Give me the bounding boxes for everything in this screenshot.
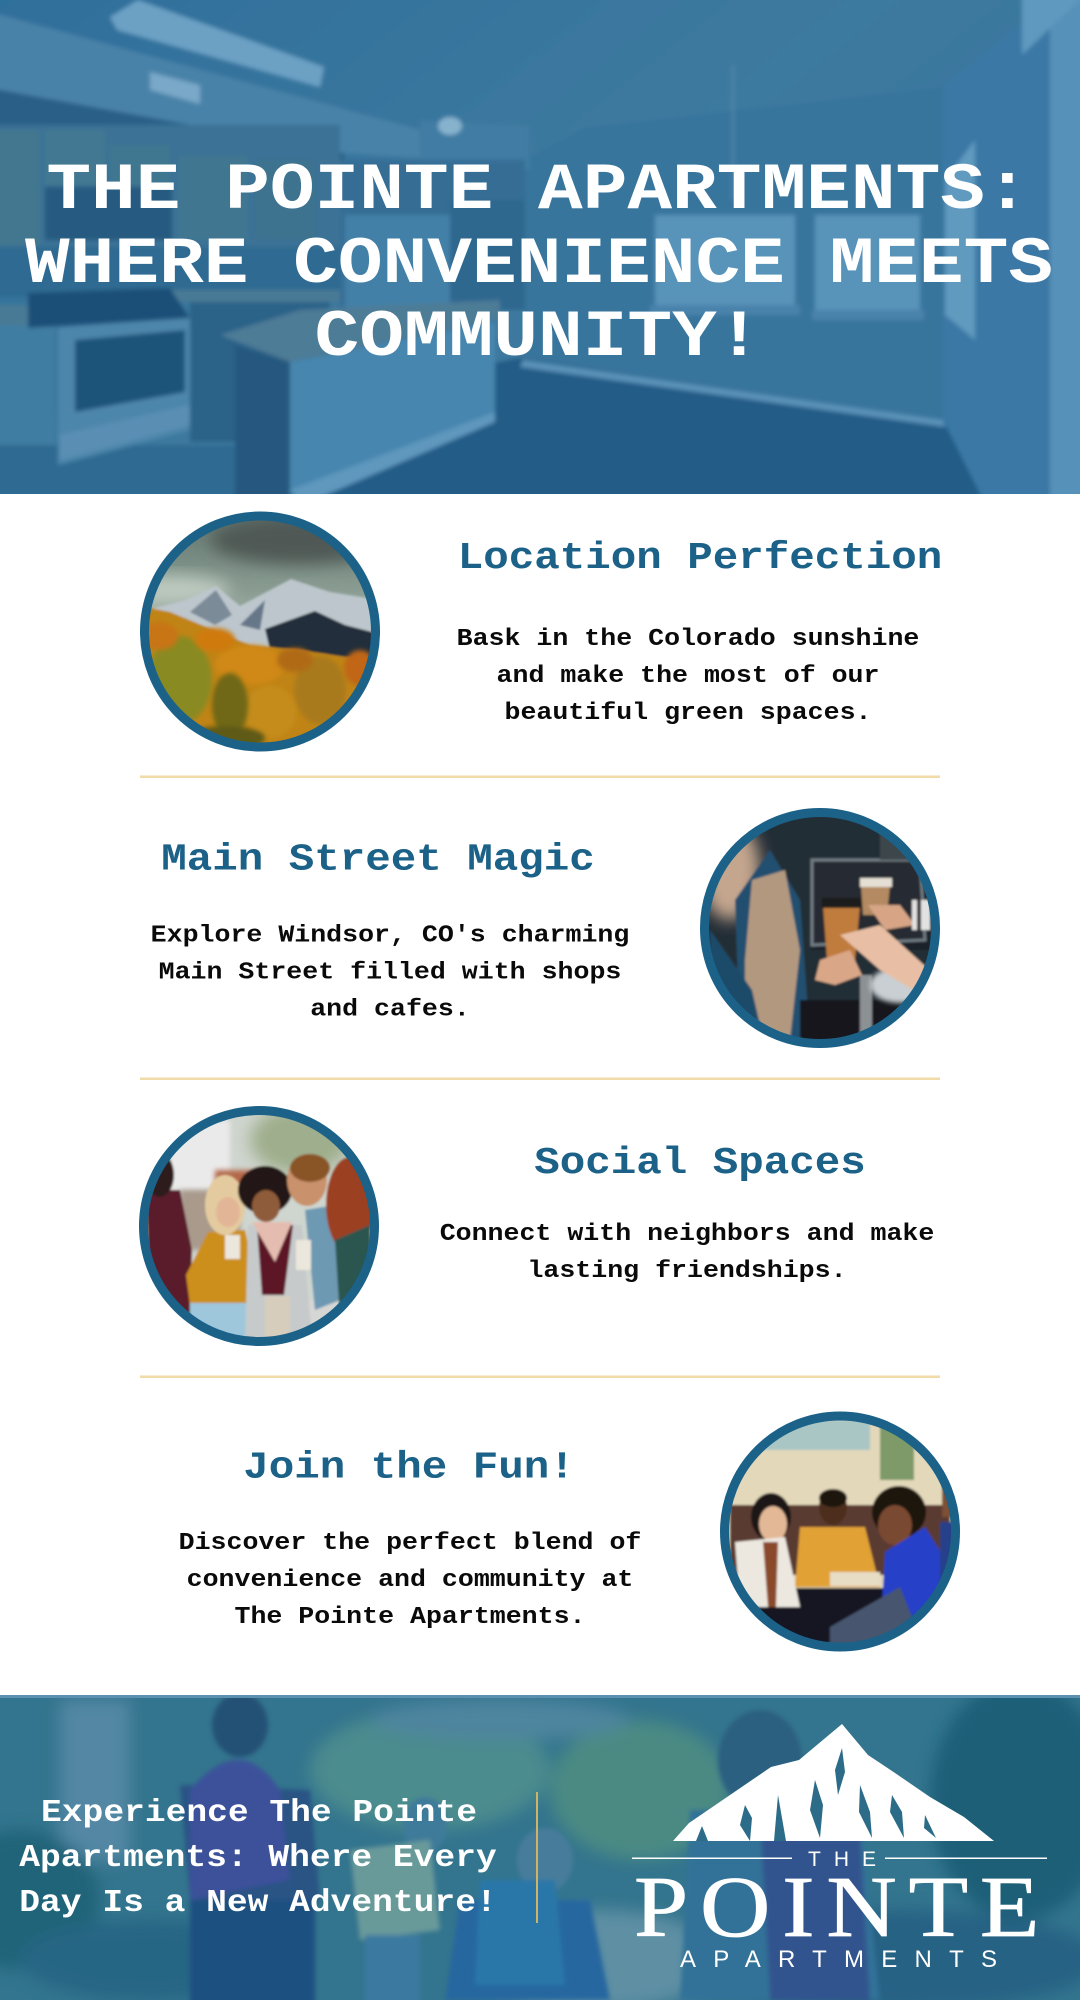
body text: Main Street filled with shops [159, 958, 621, 986]
body text: convenience and community at [187, 1566, 633, 1594]
body text: beautiful green spaces. [505, 699, 871, 727]
hero photo: blue tinted kitchen [0, 0, 1080, 505]
heading: Main Street Magic [161, 838, 595, 882]
title: THE POINTE APARTMENTS: [46, 155, 1030, 229]
body text [457, 625, 919, 727]
photo: group of friends [140, 1106, 380, 1350]
photo: coffee hand-off [700, 808, 950, 1060]
panel: social spaces [140, 1106, 934, 1350]
body text [179, 1529, 641, 1631]
logo: The Pointe Apartments: POINTE [634, 1859, 1039, 1955]
body text [151, 921, 629, 1023]
body text: Explore Windsor, CO's charming [151, 921, 629, 949]
panel: join the fun [179, 1412, 965, 1658]
logo: The Pointe Apartments: APARTMENTS [680, 1946, 997, 1973]
heading: Location Perfection [458, 537, 942, 580]
panel: hero header with kitchen photo [0, 0, 1080, 505]
body text: and make the most of our [497, 662, 879, 690]
body text: The Pointe Apartments. [234, 1603, 586, 1631]
closing message: Day Is a New Adventure! [19, 1885, 497, 1920]
title: COMMUNITY! [315, 302, 761, 376]
panel: main street magic [151, 808, 950, 1060]
title [25, 155, 1053, 376]
body text: Bask in the Colorado sunshine [457, 625, 919, 653]
panel: location perfection [110, 512, 942, 760]
heading: Social Spaces [534, 1142, 866, 1185]
body text: Discover the perfect blend of [179, 1529, 641, 1557]
heading: Join the Fun! [243, 1446, 575, 1490]
closing message [19, 1795, 497, 1920]
logo: The Pointe Apartments [632, 1724, 1047, 1973]
body text [440, 1220, 934, 1285]
logo: The Pointe Apartments: THE [808, 1848, 876, 1871]
body text: lasting friendships. [527, 1257, 847, 1285]
panel: footer [0, 1680, 1080, 2000]
body text: Connect with neighbors and make [440, 1220, 934, 1248]
title: WHERE CONVENIENCE MEETS [25, 229, 1053, 303]
photo: friends reading together [720, 1412, 965, 1658]
icon: snowy mountain [673, 1724, 994, 1841]
photo: autumn mountains [140, 512, 380, 752]
body text: and cafes. [310, 995, 470, 1023]
footer photo: hikers in forest [0, 1680, 1080, 2000]
closing message: Apartments: Where Every [19, 1840, 497, 1875]
closing message: Experience The Pointe [41, 1795, 477, 1830]
